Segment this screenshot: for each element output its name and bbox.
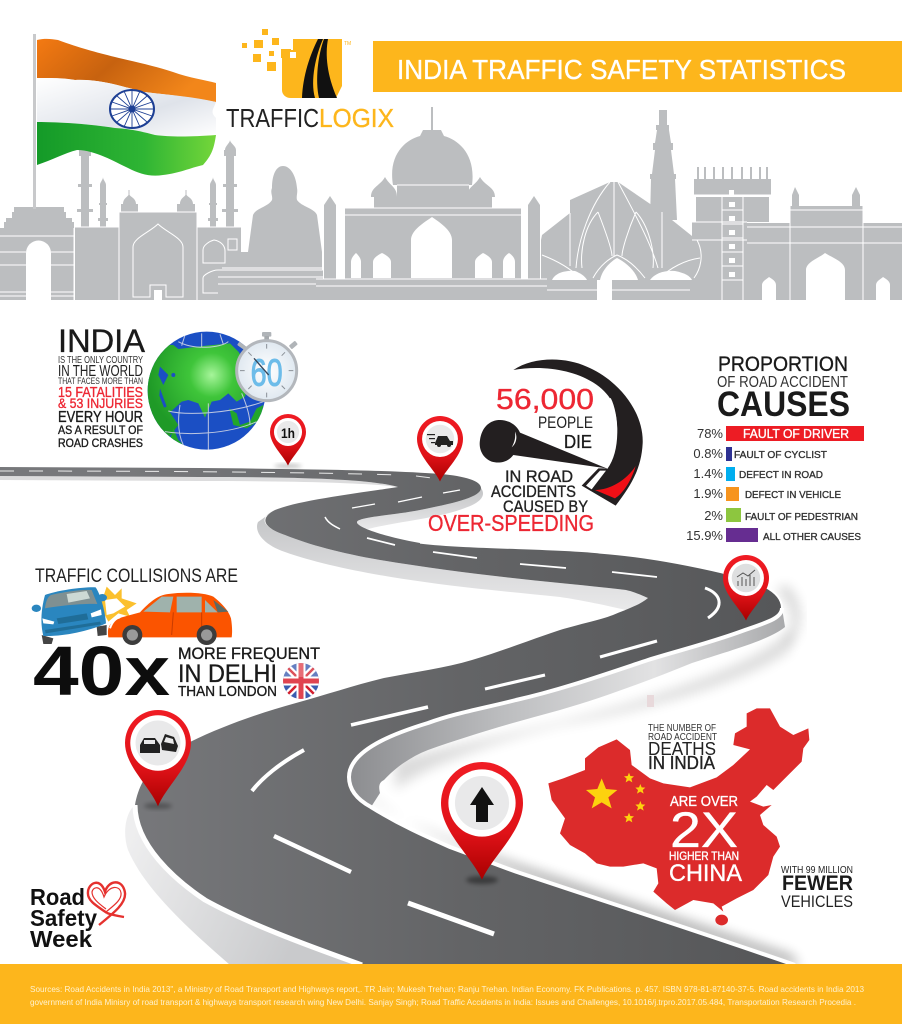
- text block: deaths in India: ROAD ACCIDENT: [648, 732, 717, 743]
- heading: proportion of road accident causes: PROPORTION: [718, 353, 848, 376]
- text block: fewer vehicles: FEWER: [782, 872, 853, 895]
- text block: over 2X higher than China: 2X: [670, 802, 738, 858]
- pin: one hour: [270, 414, 306, 468]
- text block: India statistic: AS A RESULT OF: [58, 423, 143, 437]
- text block: people die: ACCIDENTS: [491, 482, 576, 501]
- pin: up arrow: [441, 762, 523, 884]
- text block: India statistic: EVERY HOUR: [58, 409, 143, 426]
- bar: fault of pedestrian: FAULT OF PEDESTRIAN: [745, 511, 858, 523]
- stat: 40x: 40x: [33, 632, 170, 710]
- panel: accident causes: [686, 353, 864, 543]
- logo: TrafficLogix: TM: [344, 41, 351, 47]
- highlight: over-speeding: OVER-SPEEDING: [428, 510, 594, 536]
- stat: 56,000: 56,000: [496, 384, 594, 416]
- text block: people die: [491, 413, 593, 516]
- logo: TrafficLogix: [226, 29, 394, 133]
- small marker artefact: [647, 695, 654, 707]
- text block: people die: DIE: [564, 432, 592, 452]
- winding road: [0, 467, 800, 968]
- bar: fault of driver: [697, 426, 864, 441]
- bar: all other causes: [686, 528, 861, 543]
- icon: stopwatch: 60: [251, 352, 283, 395]
- bar: all other causes: 15.9%: [686, 528, 723, 543]
- pin: chart: [723, 555, 769, 621]
- bar: fault of pedestrian: [704, 508, 858, 523]
- text block: more frequent in Delhi than London: THAN LONDON: [178, 683, 277, 700]
- flag of India on pole: [33, 34, 216, 209]
- text block: India statistic: THAT FACES MORE THAN: [58, 376, 143, 387]
- text block: India statistic: [58, 354, 143, 450]
- bar: fault of cyclist: [693, 446, 828, 461]
- text block: fewer vehicles: [781, 865, 853, 911]
- text block: more frequent in Delhi than London: [178, 644, 320, 700]
- logo: Road Safety Week: Safety: [30, 905, 97, 931]
- bar: all other causes: ALL OTHER CAUSES: [763, 531, 861, 543]
- icon: flag stars: [586, 773, 645, 822]
- heading: proportion of road accident causes: OF ROAD ACCIDENT: [717, 374, 848, 391]
- text block: over 2X higher than China: CHINA: [669, 860, 742, 887]
- bar: defect in road: 1.4%: [693, 466, 723, 481]
- map: China: [548, 708, 809, 925]
- text block: deaths in India: DEATHS: [648, 739, 716, 759]
- bar: defect in road: [693, 466, 823, 481]
- icon: speedometer gauge: [480, 360, 643, 506]
- logo: TrafficLogix: TRAFFIC: [226, 103, 319, 133]
- panel: India fatalities: [58, 323, 298, 450]
- bar: fault of driver: FAULT OF DRIVER: [743, 427, 849, 441]
- heading: proportion of road accident causes: CAUSES: [717, 385, 850, 424]
- heading: traffic collisions are: TRAFFIC COLLISIONS ARE: [35, 566, 238, 587]
- icon: Ashoka chakra: [110, 90, 154, 128]
- text block: fewer vehicles: VEHICLES: [781, 892, 853, 911]
- panel: traffic collisions: [32, 566, 320, 710]
- text block: people die: IN ROAD: [505, 467, 573, 486]
- icon: globe: [143, 332, 266, 450]
- title banner: [373, 41, 902, 92]
- heading: India: INDIA: [58, 323, 146, 359]
- title banner: INDIA TRAFFIC SAFETY STATISTICS: [397, 54, 846, 85]
- skyline of Indian monuments: [0, 107, 902, 300]
- pin: crash: [125, 710, 191, 809]
- heading: proportion of road accident causes: [717, 353, 850, 424]
- text block: more frequent in Delhi than London: MORE FREQUENT: [178, 644, 320, 663]
- footer band with sources: [0, 964, 902, 1024]
- text block: India statistic: & 53 INJURIES: [58, 395, 143, 411]
- text block: India statistic: IS THE ONLY COUNTRY: [58, 354, 143, 366]
- footer band with sources: Sources: Road Accidents in India 2013", a Ministry of Road Transport and Highways report,. TR Jain; Mukesh Trehan; Ranju Trehan. Indian Economy. FK Publications. p. 457. ISBN 978-81-87140-37-5. Road accidents in India 2013: [30, 984, 864, 994]
- panel: over-speeding: [428, 360, 643, 536]
- pin: one hour: 1h: [281, 425, 295, 441]
- text block: people die: PEOPLE: [538, 413, 593, 432]
- text block: India statistic: 15 FATALITIES: [58, 384, 143, 401]
- bar: fault of driver: 78%: [697, 426, 723, 441]
- icon: UK flag: [283, 663, 319, 699]
- panel: China comparison: [548, 708, 853, 925]
- bar: fault of cyclist: FAULT OF CYCLIST: [734, 449, 828, 461]
- bar: defect in vehicle: [693, 486, 841, 501]
- text block: more frequent in Delhi than London: IN DELHI: [178, 660, 277, 688]
- logo: Road Safety Week: [30, 882, 125, 952]
- text block: deaths in India: IN INDIA: [648, 753, 715, 773]
- logo: Road Safety Week: Week: [30, 926, 92, 952]
- bar: defect in vehicle: 1.9%: [693, 486, 723, 501]
- bar: fault of pedestrian: 2%: [704, 508, 723, 523]
- text block: India statistic: IN THE WORLD: [58, 363, 143, 380]
- text block: deaths in India: THE NUMBER OF: [648, 723, 716, 734]
- bar: fault of cyclist: 0.8%: [693, 446, 723, 461]
- bar: defect in road: DEFECT IN ROAD: [739, 469, 823, 481]
- text block: over 2X higher than China: ARE OVER: [670, 793, 738, 810]
- bar chart: causes: [686, 426, 864, 543]
- text block: over 2X higher than China: [669, 793, 742, 887]
- text block: deaths in India: [648, 723, 717, 773]
- text block: over 2X higher than China: HIGHER THAN: [669, 849, 739, 863]
- icon: colliding cars: [32, 587, 232, 645]
- footer band with sources: government of India Minisry of road transport & highways transport research wing New Delhi. Sanjay Singh; Road Traffic Accidents in India: Issues and Challenges, 10.1016/j.trpro.2017.05.484, Transportation Research Procedia .: [30, 997, 856, 1007]
- text block: fewer vehicles: WITH 99 MILLION: [781, 865, 853, 876]
- logo: TrafficLogix: LOGIX: [319, 103, 394, 133]
- text block: people die: CAUSED BY: [503, 497, 588, 516]
- icon: stopwatch: [237, 332, 298, 401]
- bar: defect in vehicle: DEFECT IN VEHICLE: [745, 489, 841, 501]
- text block: India statistic: ROAD CRASHES: [58, 436, 143, 450]
- logo: Road Safety Week: Road: [30, 884, 85, 910]
- pin: speeding car: [417, 416, 463, 482]
